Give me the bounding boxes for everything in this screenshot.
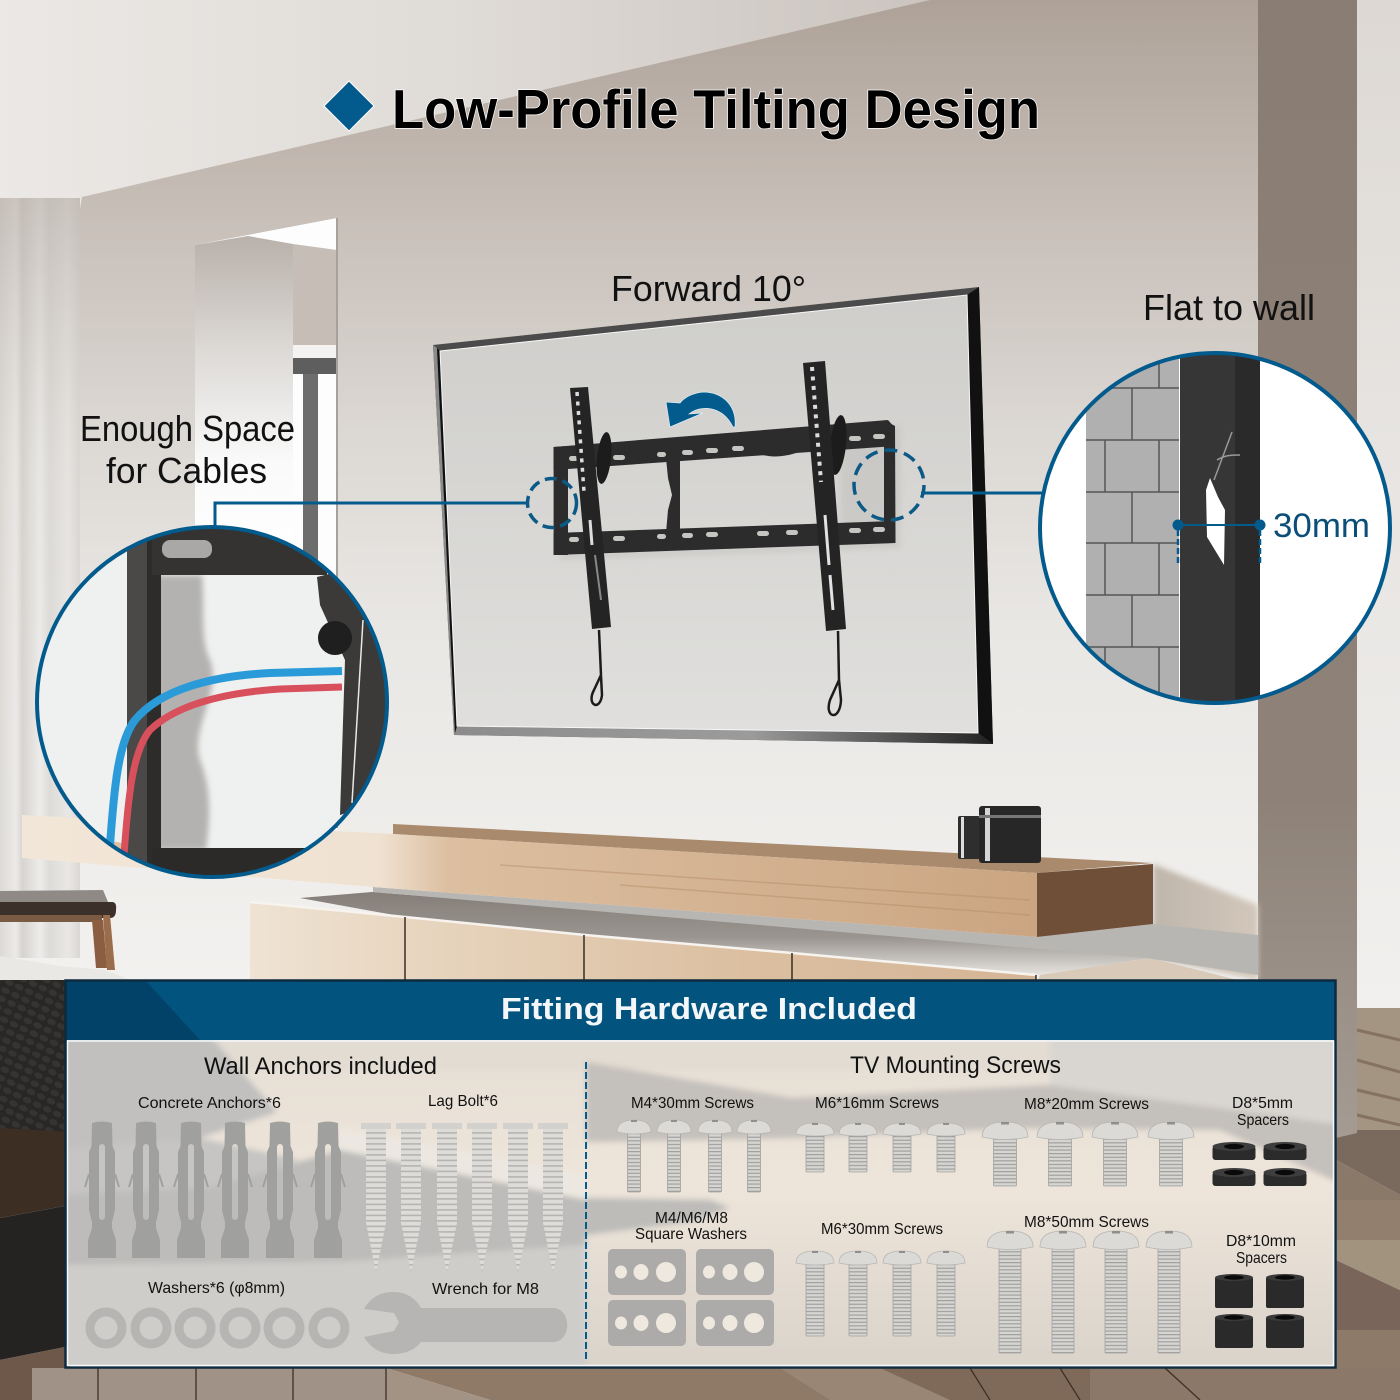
right wall strip bbox=[1357, 0, 1400, 1010]
wrench bbox=[364, 1292, 567, 1354]
left tilt arm bbox=[570, 387, 614, 629]
label: D8*5mm Spacers: Spacers bbox=[1237, 1112, 1289, 1129]
callout connector: left bbox=[215, 503, 528, 527]
divider bbox=[585, 1062, 587, 1360]
label: Flat to wall: Flat to wall bbox=[1143, 287, 1315, 328]
round washers bbox=[86, 1307, 350, 1349]
panel inner highlight bbox=[68, 1041, 1334, 1366]
mount shadow bbox=[560, 425, 900, 560]
heading: TV Mounting Screws: TV Mounting Screws bbox=[850, 1052, 1061, 1079]
wall bbox=[0, 0, 1400, 1010]
bracket top bar bbox=[161, 529, 327, 575]
arm on right bbox=[317, 574, 385, 815]
wood floor, right bbox=[1336, 1008, 1400, 1368]
label: Square Washers: M4/M6/M8 bbox=[655, 1210, 728, 1227]
dashed marker: left bbox=[528, 478, 576, 528]
right tilt arm bbox=[803, 361, 849, 631]
curtain, left bbox=[0, 198, 80, 958]
circle outline bbox=[37, 527, 387, 877]
dashed marker: right bbox=[854, 450, 924, 520]
left safety cord bbox=[592, 630, 602, 705]
label: M6*16mm: M6*16mm Screws bbox=[815, 1095, 939, 1112]
concrete anchors bbox=[85, 1122, 345, 1258]
TV frame outline bbox=[433, 287, 993, 744]
hinge gap bbox=[1206, 478, 1225, 565]
label: D8*5mm Spacers: D8*5mm bbox=[1232, 1095, 1293, 1112]
pivot knob bbox=[318, 621, 352, 655]
screws M6*16 bbox=[796, 1123, 965, 1172]
panel border bbox=[66, 980, 1336, 1368]
tilting wall mount bracket bbox=[554, 361, 900, 715]
bracket slot bbox=[162, 540, 212, 558]
heading: Wall Anchors included: Wall Anchors included bbox=[204, 1053, 437, 1080]
panel body background bbox=[57, 1030, 1344, 1376]
panel header bar bbox=[65, 980, 1336, 1041]
label: Enough Space for Cables: for Cables bbox=[106, 450, 267, 491]
shelf detail bbox=[114, 842, 122, 849]
panel heading: Fitting Hardware Included bbox=[501, 991, 917, 1026]
doorway opening bbox=[195, 218, 338, 834]
label: Washers: Washers*6 (φ8mm) bbox=[148, 1280, 285, 1297]
wire: blue bbox=[110, 671, 342, 845]
label: M4*30mm: M4*30mm Screws bbox=[631, 1095, 754, 1112]
right safety cord bbox=[829, 631, 841, 715]
bed bbox=[0, 956, 130, 1360]
label: Enough Space for Cables bbox=[80, 408, 295, 491]
spacers 10mm bbox=[1215, 1274, 1304, 1348]
callout connector: right bbox=[921, 492, 1043, 494]
wall plate bbox=[554, 420, 896, 555]
label: Square Washers bbox=[635, 1210, 747, 1243]
bracket bottom bar bbox=[161, 848, 305, 875]
wood floor bbox=[0, 1346, 1400, 1400]
chair bbox=[0, 890, 116, 970]
square washers bbox=[608, 1249, 774, 1346]
mount slots bbox=[569, 434, 885, 542]
bracket side column bbox=[127, 542, 147, 862]
structural column, right bbox=[1258, 0, 1357, 1138]
panel: fitting hardware included bbox=[57, 980, 1344, 1376]
detail circle: flat to wall 30mm bbox=[1030, 340, 1400, 710]
screws M4*30 bbox=[617, 1120, 771, 1192]
icon: blue diamond bbox=[324, 81, 374, 131]
arm highlight bbox=[352, 620, 363, 803]
screws M8*50 bbox=[987, 1231, 1192, 1353]
label: Wrench: Wrench for M8 bbox=[432, 1281, 539, 1298]
label: M8*50mm: M8*50mm Screws bbox=[1024, 1214, 1149, 1231]
lag bolts bbox=[361, 1123, 568, 1273]
grey shelf underside bbox=[373, 887, 1258, 975]
arrow: forward tilt bbox=[666, 392, 735, 427]
label: M6*30mm: M6*30mm Screws bbox=[821, 1221, 943, 1238]
wire: red bbox=[124, 687, 342, 855]
cabinet below shelf bbox=[250, 892, 1258, 985]
label: 30mm: 30mm bbox=[1273, 507, 1370, 545]
label: D8*10mm Spacers: Spacers bbox=[1236, 1250, 1287, 1267]
title text: Low-Profile Tilting Design bbox=[392, 78, 1040, 140]
title bbox=[324, 78, 1040, 140]
dimension marker 30mm bbox=[1172, 520, 1266, 564]
label: M8*20mm: M8*20mm Screws bbox=[1024, 1096, 1149, 1113]
shelf wall shadow bbox=[1153, 864, 1258, 980]
label: Enough Space for Cables: Enough Space bbox=[80, 408, 295, 449]
screws M6*30 bbox=[796, 1251, 965, 1336]
ceiling bbox=[0, 0, 930, 209]
brick wall bbox=[1086, 340, 1179, 710]
spacers 5mm bbox=[1212, 1142, 1306, 1186]
label: D8*5mm Spacers bbox=[1232, 1095, 1293, 1129]
screws M8*20 bbox=[982, 1122, 1194, 1186]
hinge bolt bbox=[1214, 432, 1240, 480]
label: Square Washers: Square Washers bbox=[635, 1226, 747, 1243]
circle outline bbox=[1040, 353, 1390, 703]
black bracket profile bbox=[1180, 355, 1235, 701]
shadow on wall bbox=[161, 575, 216, 848]
label: D8*10mm Spacers bbox=[1226, 1233, 1296, 1267]
label: D8*10mm Spacers: D8*10mm bbox=[1226, 1233, 1296, 1250]
label: Concrete Anchors: Concrete Anchors*6 bbox=[138, 1095, 281, 1112]
decorative candles on shelf bbox=[958, 806, 1041, 863]
label: Forward 10°: Forward 10° bbox=[611, 268, 806, 309]
floating wood shelf bbox=[22, 815, 1153, 937]
detail circle: cable space bbox=[30, 520, 400, 890]
label: Lag Bolt: Lag Bolt*6 bbox=[428, 1093, 498, 1110]
